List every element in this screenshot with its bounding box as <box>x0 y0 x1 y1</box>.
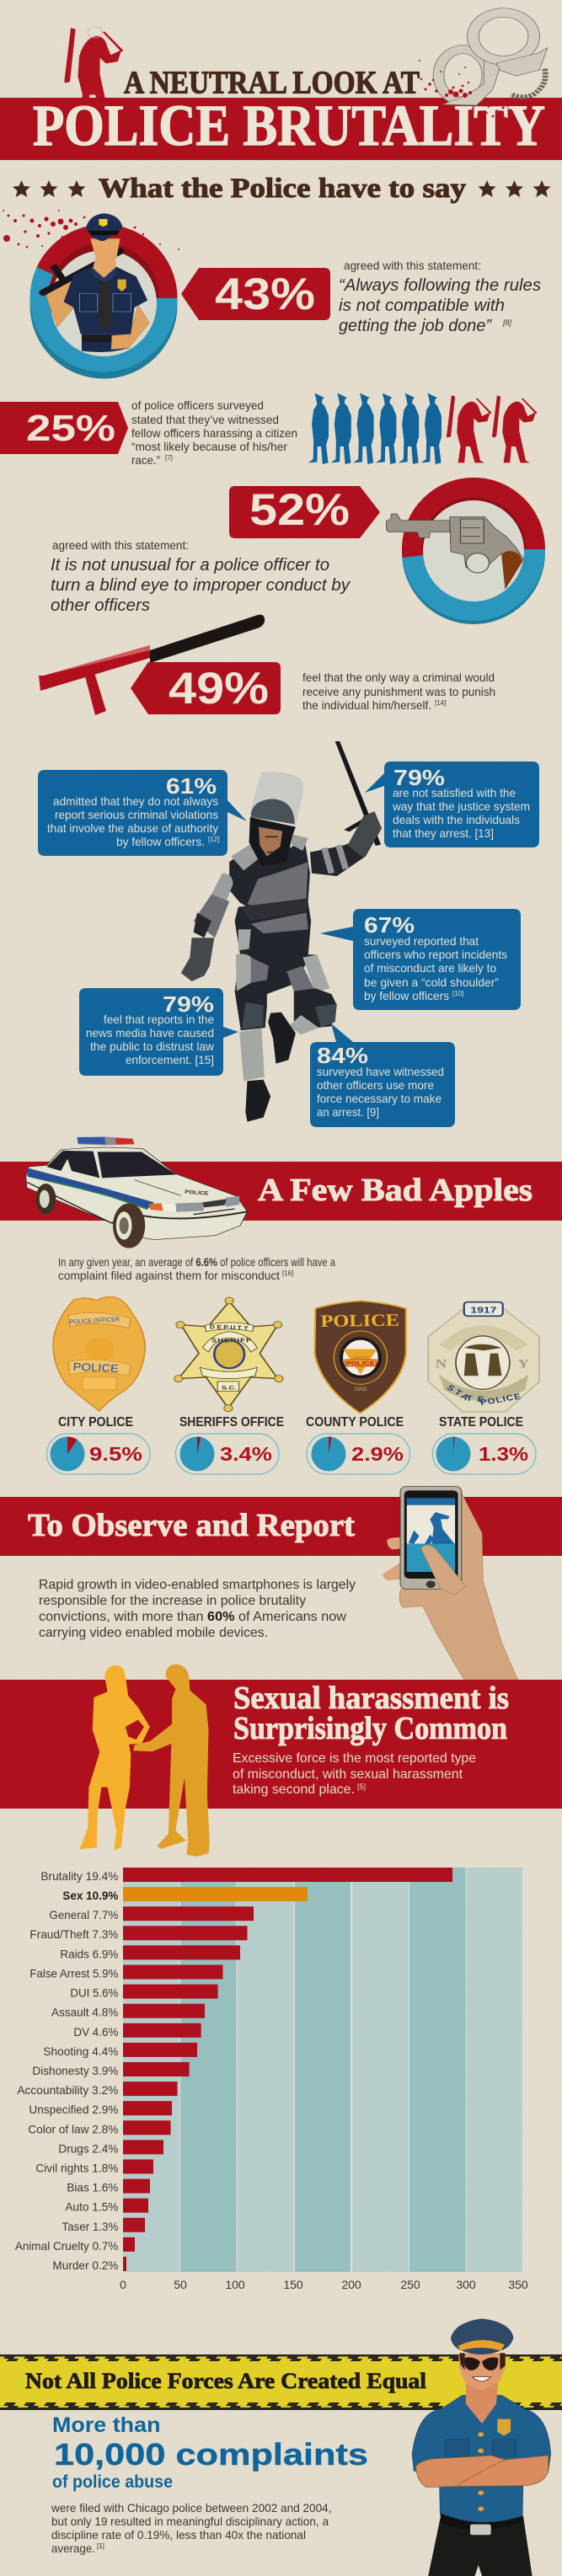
panel: a few bad apples <box>0 1136 562 1474</box>
heading: A Few Bad Apples <box>258 1173 533 1208</box>
callout 84%: force necessary to make <box>317 1092 442 1105</box>
text: agreed with statement: “Always following the rules <box>339 276 541 295</box>
text: complaint line two: [16] <box>282 1269 293 1277</box>
badge: state police: POLICE <box>479 1392 522 1408</box>
callout 61%: admitted that they do not always <box>53 794 218 808</box>
text: witnessed harassing: of police officers surveyed <box>131 398 264 412</box>
panel: sexual harassment <box>0 1665 562 1857</box>
category labels <box>15 1869 119 2272</box>
pill: city 9.5% <box>47 1434 150 1474</box>
paragraph: smartphones: convictions, with more than 60% of Americans now <box>39 1610 346 1624</box>
text: punish individual: the individual him/herself. <box>302 698 431 712</box>
icon: baton <box>39 615 265 715</box>
callout 79% right: way that the justice system <box>392 799 530 813</box>
pill: sheriff 3.4%: 3.4% <box>220 1443 272 1465</box>
heading on tape: Not All Police Forces Are Created Equal <box>25 2369 426 2393</box>
heading: To Observe and Report <box>28 1508 355 1543</box>
category labels: Murder 0.2% <box>52 2258 118 2272</box>
panel: title header <box>0 13 562 160</box>
badge: state police <box>428 1302 539 1412</box>
illustration: riot officer <box>181 741 382 1122</box>
category labels: Brutality 19.4% <box>40 1869 118 1883</box>
stars left <box>13 180 86 197</box>
icon: revolver <box>386 514 523 588</box>
paragraph: excessive force: Excessive force is the most reported type <box>233 1751 476 1766</box>
text: punish individual <box>302 671 495 712</box>
category labels: DV 4.6% <box>73 2025 118 2039</box>
text: agreed with statement: agreed with this statement: <box>344 259 481 272</box>
category labels: False Arrest 5.9% <box>29 1966 118 1980</box>
text: agreed with statement: getting the job done” <box>339 317 492 335</box>
headline: more than 10,000 complaints <box>52 2413 368 2492</box>
panel: callouts <box>38 762 539 1127</box>
category labels: General 7.7% <box>49 1908 118 1921</box>
agency labels: COUNTY POLICE <box>306 1415 404 1430</box>
text: agreed with statement: is not compatible with <box>339 297 505 315</box>
heading <box>233 1681 509 1746</box>
category labels: Raids 6.9% <box>60 1947 118 1960</box>
callout 79% right: are not satisfied with the <box>393 786 516 799</box>
agency labels: CITY POLICE <box>58 1415 133 1430</box>
red title banner <box>0 98 562 160</box>
category labels: Dishonesty 3.9% <box>32 2064 118 2077</box>
panel: to observe and report <box>0 1486 562 1680</box>
pictogram: six blue and two red officers <box>308 393 538 464</box>
x axis labels: 50 <box>174 2278 187 2291</box>
callout 61%: 61% <box>166 773 217 799</box>
paragraph: Chicago police: were filed with Chicago police between 2002 and 2004, <box>51 2501 332 2515</box>
text: blind eye statement: It is not unusual for a police officer to <box>51 556 329 575</box>
pill: county 2.9% <box>307 1434 409 1474</box>
callout 79% left: 79% <box>163 991 214 1017</box>
text: witnessed harassing: fellow officers harassing a citizen <box>131 426 297 440</box>
callout 67%: of misconduct are likely to <box>364 961 496 975</box>
tag 49% <box>131 662 281 714</box>
hazard tape band <box>0 2354 562 2410</box>
tag 49%: 49% <box>169 664 269 713</box>
icon: hand holding phone <box>383 1486 518 1680</box>
callout 79% right: deals with the individuals <box>393 813 520 826</box>
callout 79% right: 79% <box>393 765 445 790</box>
icon: police car <box>26 1136 247 1248</box>
bar chart: misconduct types <box>15 1868 528 2291</box>
callout 79% right: that they arrest. [13] <box>393 826 494 840</box>
headline: more than 10,000 complaints: 10,000 complaints <box>54 2437 368 2472</box>
pill: county 2.9%: 2.9% <box>351 1443 404 1465</box>
blood splatter on title <box>419 60 472 98</box>
callout 67%: by fellow officers <box>364 989 449 1002</box>
callout 61%: that involve the abuse of authority <box>47 821 218 835</box>
headline: more than 10,000 complaints: More than <box>52 2413 160 2437</box>
paragraph: excessive force <box>233 1751 476 1797</box>
paragraph: excessive force: [5] <box>357 1782 366 1791</box>
callout 67%: [10] <box>452 990 463 997</box>
badge: city police: POLICE <box>72 1361 120 1375</box>
text: witnessed harassing: stated that they’ve witnessed <box>131 413 279 426</box>
callout 67%: surveyed reported that <box>364 934 479 948</box>
category labels: DUI 5.6% <box>70 1986 118 2000</box>
badge: county police: 1955 <box>354 1387 367 1392</box>
section heading: What the Police have to say <box>99 174 467 204</box>
callout 61%: by fellow officers. <box>116 835 205 848</box>
tag 25%: 25% <box>26 408 115 449</box>
text: agreed with statement: [8] <box>502 318 512 327</box>
bars <box>123 1868 452 2271</box>
category labels: Sex 10.9% <box>62 1889 119 1902</box>
text: witnessed harassing: “most likely because of his/her <box>131 440 287 453</box>
text: punish individual: receive any punishment was to punish <box>302 685 495 698</box>
tag 52% <box>229 485 380 538</box>
blood splatter by officer <box>3 210 179 250</box>
text: blind eye statement: agreed with this statement: <box>52 538 189 552</box>
badge: county police: COUNTY <box>352 1355 369 1360</box>
paragraph: smartphones <box>39 1578 356 1640</box>
text: witnessed harassing: race.” <box>131 453 160 467</box>
callout 79% left: enforcement. [15] <box>126 1053 214 1066</box>
icon: smiling officer with crossed arms <box>412 2318 551 2576</box>
callout 61%: [12] <box>208 836 219 843</box>
icon: handcuffs <box>439 13 548 105</box>
callout 79% left: news media have caused <box>86 1026 214 1039</box>
badge: sheriffs office: DEPUTY <box>210 1323 249 1331</box>
callout 84%: 84% <box>317 1043 368 1068</box>
callout 61% <box>38 770 247 856</box>
category labels: Drugs 2.4% <box>58 2141 118 2155</box>
badge: sheriffs office: S.C. <box>222 1384 237 1391</box>
x axis labels: 150 <box>283 2278 303 2291</box>
x axis labels: 350 <box>508 2278 528 2291</box>
callout 84%: other officers use more <box>317 1078 434 1092</box>
text: agreed with statement <box>339 259 541 335</box>
pill: state 1.3% <box>433 1434 536 1474</box>
x axis labels: 100 <box>225 2278 245 2291</box>
heading: Surprisingly Common <box>233 1711 507 1746</box>
icon: riot police silhouette <box>64 27 123 116</box>
panel: what the police have to say heading <box>13 174 551 204</box>
category labels: Fraud/Theft 7.3% <box>29 1927 118 1941</box>
badge: county police: POLICE <box>346 1361 375 1366</box>
silhouette: man <box>133 1665 210 1857</box>
paragraph: Chicago police: but only 19 resulted in meaningful disciplinary action, a <box>51 2515 329 2528</box>
text: punish individual: [14] <box>435 699 446 707</box>
tag 25% <box>0 402 128 454</box>
panel: 52% statistic <box>51 478 545 624</box>
badge: city police <box>53 1297 145 1411</box>
pill: sheriff 3.4% <box>175 1434 279 1474</box>
callout 67%: officers who report incidents <box>364 948 507 961</box>
tag 43% <box>181 268 330 320</box>
red band <box>0 1680 562 1809</box>
red heading band <box>0 1497 562 1556</box>
callout 84%: surveyed have witnessed <box>317 1065 444 1078</box>
callout 67%: 67% <box>364 912 415 938</box>
x axis labels: 300 <box>456 2278 476 2291</box>
badge: sheriffs office <box>174 1297 283 1412</box>
category labels: Civil rights 1.8% <box>35 2162 118 2175</box>
agency labels: SHERIFFS OFFICE <box>179 1415 284 1430</box>
tag 52%: 52% <box>249 485 350 535</box>
heading: Sexual harassment is <box>233 1681 509 1716</box>
callout 79% left <box>79 988 238 1076</box>
category labels: Animal Cruelty 0.7% <box>15 2239 118 2253</box>
x axis labels <box>120 2278 528 2291</box>
headline: more than 10,000 complaints: of police abuse <box>52 2472 173 2492</box>
x axis labels: 0 <box>120 2278 126 2291</box>
tag 43%: 43% <box>215 270 315 319</box>
panel: 25% statistic <box>0 393 538 467</box>
paragraph: Chicago police: discipline rate of 0.19%, less than 40x the national <box>51 2528 306 2541</box>
category labels: Auto 1.5% <box>65 2200 118 2214</box>
panel: 49% statistic <box>39 615 495 715</box>
x axis labels: 200 <box>341 2278 361 2291</box>
x axis labels: 250 <box>400 2278 420 2291</box>
badge: sheriffs office: SHERIFF <box>211 1336 251 1344</box>
paragraph: Chicago police <box>51 2501 332 2555</box>
panel: not all police forces <box>0 2318 562 2576</box>
donut chart 52 percent <box>402 478 545 624</box>
chart background stripes <box>123 1868 522 2272</box>
callout 67%: be given a “cold shoulder” <box>364 975 499 989</box>
stars right <box>479 180 551 197</box>
icon: police car: POLICE <box>185 1189 209 1196</box>
paragraph: excessive force: of misconduct, with sexual harassment <box>233 1767 463 1782</box>
callout 79% right <box>365 762 539 847</box>
callout 84%: an arrest. [9] <box>317 1105 379 1119</box>
category labels: Assault 4.8% <box>51 2006 118 2019</box>
text: blind eye statement: other officers <box>51 596 150 615</box>
agency labels <box>58 1415 523 1430</box>
badge: county police <box>314 1301 406 1414</box>
badge: state police: TE <box>466 1394 484 1404</box>
text: 6.6% complaint statement: In any given year, an average of 6.6% of police officers will have a <box>58 1255 335 1269</box>
text: complaint line two: complaint filed against them for misconduct <box>58 1269 280 1282</box>
paragraph: smartphones: carrying video enabled mobile devices. <box>39 1626 268 1640</box>
category labels: Color of law 2.8% <box>28 2122 118 2135</box>
silhouette: woman <box>79 1665 150 1850</box>
category labels: Unspecified 2.9% <box>29 2103 118 2116</box>
agency labels: STATE POLICE <box>439 1415 523 1430</box>
badge: county police: POLICE <box>320 1311 399 1331</box>
badge: city police: POLICE OFFICER <box>69 1315 120 1325</box>
badge: state police: Y <box>518 1356 529 1371</box>
red heading band <box>0 1162 562 1221</box>
panel: 43% statistic <box>30 213 541 379</box>
callout 61%: report serious criminal violations <box>55 808 218 821</box>
callout 79% left: the public to distrust law <box>90 1039 215 1053</box>
category labels: Shooting 4.4% <box>43 2044 118 2058</box>
paragraph: Chicago police: average. <box>51 2541 95 2555</box>
pill: state 1.3%: 1.3% <box>479 1443 528 1465</box>
text: witnessed harassing: [7] <box>165 454 173 462</box>
category labels: Taser 1.3% <box>62 2220 118 2233</box>
badge: state police: 1917 <box>470 1305 497 1315</box>
badge: state police: N <box>436 1356 447 1371</box>
paragraph: smartphones: responsible for the increase in police brutality <box>39 1594 306 1608</box>
title line one: A NEUTRAL LOOK AT <box>124 66 420 101</box>
paragraph: smartphones: Rapid growth in video-enabled smartphones is largely <box>39 1578 356 1592</box>
donut chart 43 percent with officer <box>30 224 177 379</box>
category labels: Bias 1.6% <box>67 2181 118 2194</box>
paragraph: Chicago police: [1] <box>97 2542 104 2550</box>
category labels: Accountability 3.2% <box>17 2083 118 2097</box>
paragraph: excessive force: taking second place. <box>233 1782 355 1797</box>
callout 84% <box>310 1023 455 1127</box>
text: blind eye statement: turn a blind eye to improper conduct by <box>51 576 351 595</box>
text: punish individual: feel that the only way a criminal would <box>302 671 495 684</box>
icon: officer holding baton <box>43 213 149 352</box>
pill: city 9.5%: 9.5% <box>89 1443 142 1465</box>
callout 67% <box>320 909 521 1010</box>
callout 79% left: feel that reports in the <box>104 1013 214 1026</box>
text: witnessed harassing <box>131 398 297 467</box>
text: blind eye statement <box>51 538 351 615</box>
badge: state police: STA <box>444 1383 471 1403</box>
